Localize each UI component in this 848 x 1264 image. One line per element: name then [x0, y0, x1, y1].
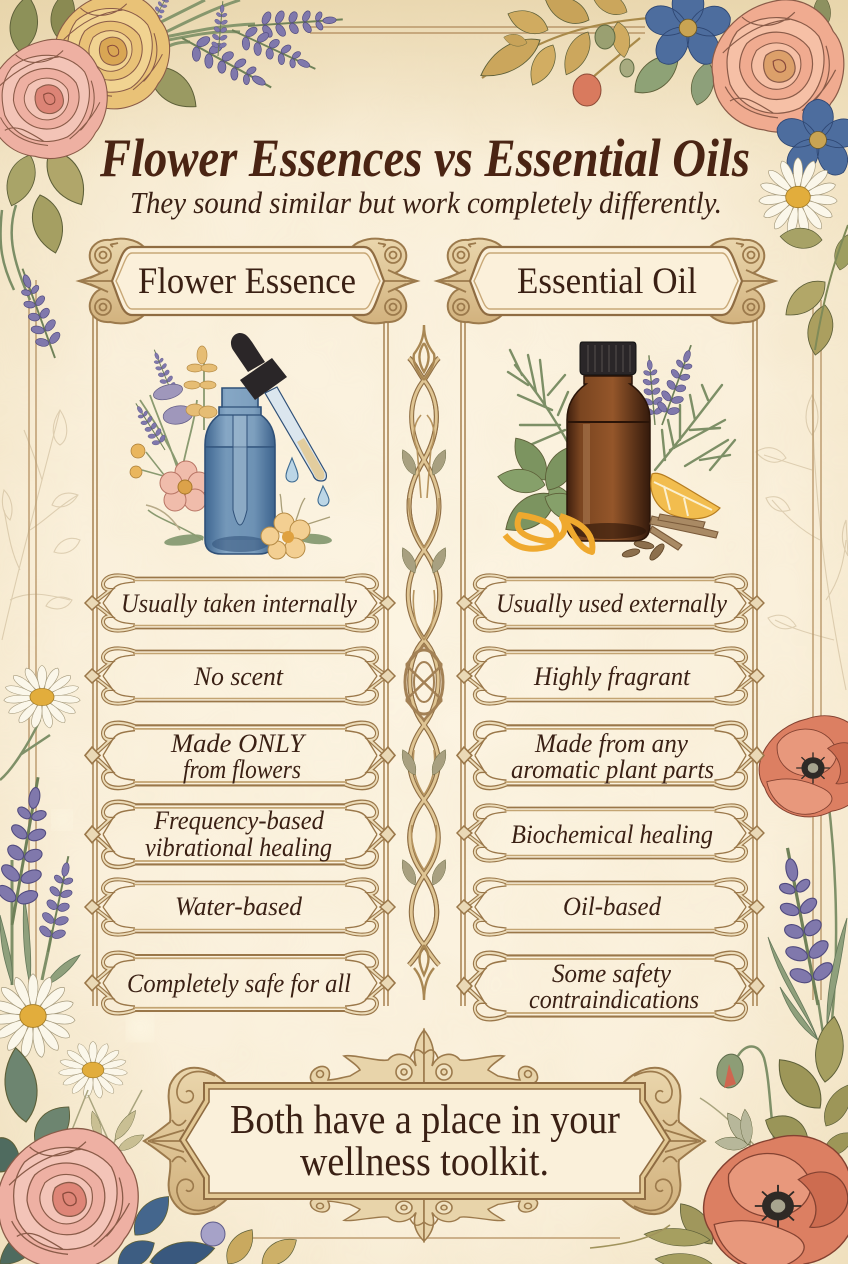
comparison row: no scent: No scent: [193, 662, 284, 691]
comparison row: highly fragrant: [457, 648, 764, 704]
comparison row: aromatic plant parts: Made from any: [534, 729, 688, 758]
title: Flower Essences vs Essential Oils: [99, 128, 750, 188]
comparison row: safety contraindications: contraindications: [529, 985, 699, 1014]
comparison row: water-based: [85, 879, 395, 935]
comparison row: safety contraindications: Some safety: [552, 959, 671, 988]
comparison row: water-based: Water-based: [175, 892, 303, 921]
comparison row: aromatic plant parts: [457, 723, 764, 788]
comparison row: vibrational healing: [85, 802, 395, 867]
comparison row: safe for all: Completely safe for all: [127, 969, 351, 998]
closing banner: [144, 1030, 705, 1241]
heading: essential oil: Essential Oil: [517, 261, 697, 302]
comparison row: taken internally: Usually taken internally: [121, 589, 357, 618]
floral border: left side: [0, 665, 302, 1264]
comparison row: safety contraindications: [457, 953, 764, 1019]
floral border: right side: [590, 716, 848, 1264]
comparison row: taken internally: [85, 575, 395, 631]
comparison row: oil-based: Oil-based: [563, 892, 662, 921]
floral corner: top left: [0, 0, 344, 363]
heading: essential oil: [437, 239, 775, 323]
comparison row: biochemical healing: [457, 805, 764, 861]
icon: amber oil bottle with herbs: [496, 341, 735, 562]
comparison row: vibrational healing: vibrational healing: [145, 833, 332, 862]
comparison row: highly fragrant: Highly fragrant: [533, 662, 691, 691]
comparison row: no scent: [85, 648, 395, 704]
icon: blue dropper bottle with flowers: [129, 333, 332, 559]
panel frame: [461, 315, 757, 1006]
comparison row: made only from flowers: Made ONLY: [170, 729, 307, 758]
floral corner: top right: [475, 0, 848, 357]
comparison row: made only from flowers: [85, 723, 395, 788]
comparison row: made only from flowers: from flowers: [183, 755, 301, 784]
central vine ornament: [398, 325, 450, 1000]
comparison row: aromatic plant parts: aromatic plant parts: [511, 755, 714, 784]
comparison row: oil-based: [457, 879, 764, 935]
faint background botanicals, left: [2, 410, 80, 640]
comparison row: safe for all: [85, 953, 395, 1013]
heading: flower essence: [79, 239, 417, 323]
panel: flower essence: [79, 239, 417, 1013]
closing banner: Both have a place in your: [230, 1096, 620, 1142]
comparison row: biochemical healing: Biochemical healing: [511, 820, 713, 849]
comparison row: used externally: [457, 575, 764, 631]
heading: flower essence: Flower Essence: [138, 261, 356, 302]
comparison row: used externally: Usually used externally: [496, 589, 727, 618]
comparison row: vibrational healing: Frequency-based: [153, 806, 325, 835]
panel: essential oil: [437, 239, 775, 1019]
faint background botanicals, right: [756, 395, 848, 690]
closing banner: wellness toolkit.: [300, 1138, 549, 1184]
panel frame: [93, 315, 388, 1006]
subtitle: They sound similar but work completely differently.: [130, 185, 722, 220]
